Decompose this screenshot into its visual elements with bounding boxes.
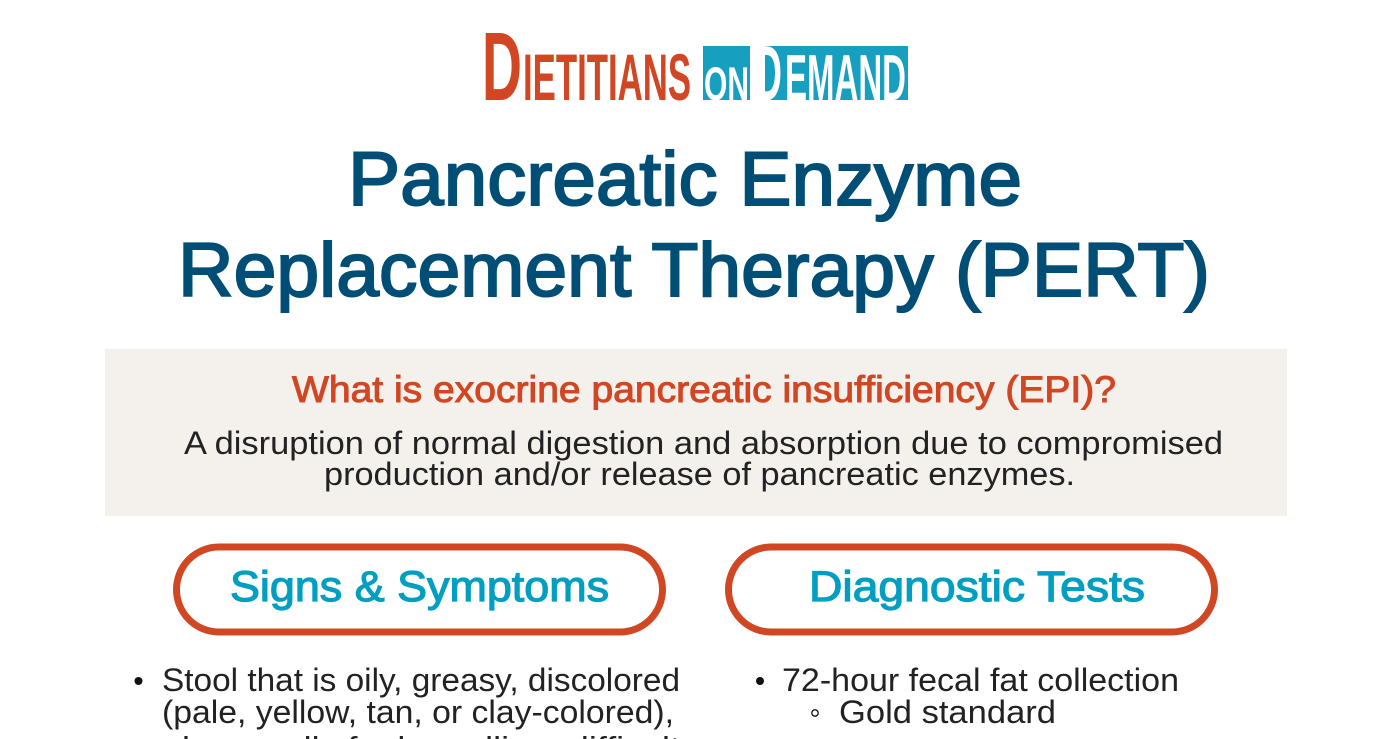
text: EPI definition: A disruption of normal digestion and absorption due to compromised bbox=[184, 425, 1223, 461]
list: signs and symptoms bbox=[134, 662, 680, 739]
logo: Dietitians on Demand: D bbox=[482, 12, 522, 121]
panel: what is EPI bbox=[105, 349, 1287, 516]
text: EPI definition: production and/or release of pancreatic enzymes. bbox=[324, 456, 1075, 492]
logo: Dietitians on Demand: IETITIANS bbox=[523, 40, 691, 114]
title: Pancreatic Enzyme bbox=[348, 137, 1022, 222]
heading pill: Signs & Symptoms: Signs & Symptoms bbox=[230, 563, 609, 611]
list: signs and symptoms: (pale, yellow, tan, or clay-colored), bbox=[162, 694, 674, 730]
list: diagnostic tests: Gold standard bbox=[839, 694, 1056, 730]
list: diagnostic tests: 72-hour fecal fat collection bbox=[782, 662, 1179, 698]
heading pill: Diagnostic Tests bbox=[728, 547, 1214, 632]
title bbox=[178, 137, 1210, 313]
logo: Dietitians on Demand: EMAND bbox=[785, 41, 906, 114]
title: Replacement Therapy (PERT) bbox=[178, 228, 1210, 313]
heading: EPI question: What is exocrine pancreatic insufficiency (EPI)? bbox=[292, 369, 1116, 410]
text: EPI definition bbox=[184, 425, 1223, 492]
logo: Dietitians on Demand: D bbox=[755, 29, 782, 117]
list: diagnostic tests bbox=[756, 662, 1179, 730]
heading pill: Signs & Symptoms bbox=[176, 547, 662, 632]
logo: Dietitians on Demand: ON bbox=[704, 57, 749, 110]
list: signs and symptoms: Stool that is oily, greasy, discolored bbox=[162, 662, 680, 698]
heading pill: Diagnostic Tests: Diagnostic Tests bbox=[809, 563, 1145, 611]
logo: Dietitians on Demand bbox=[482, 12, 908, 121]
